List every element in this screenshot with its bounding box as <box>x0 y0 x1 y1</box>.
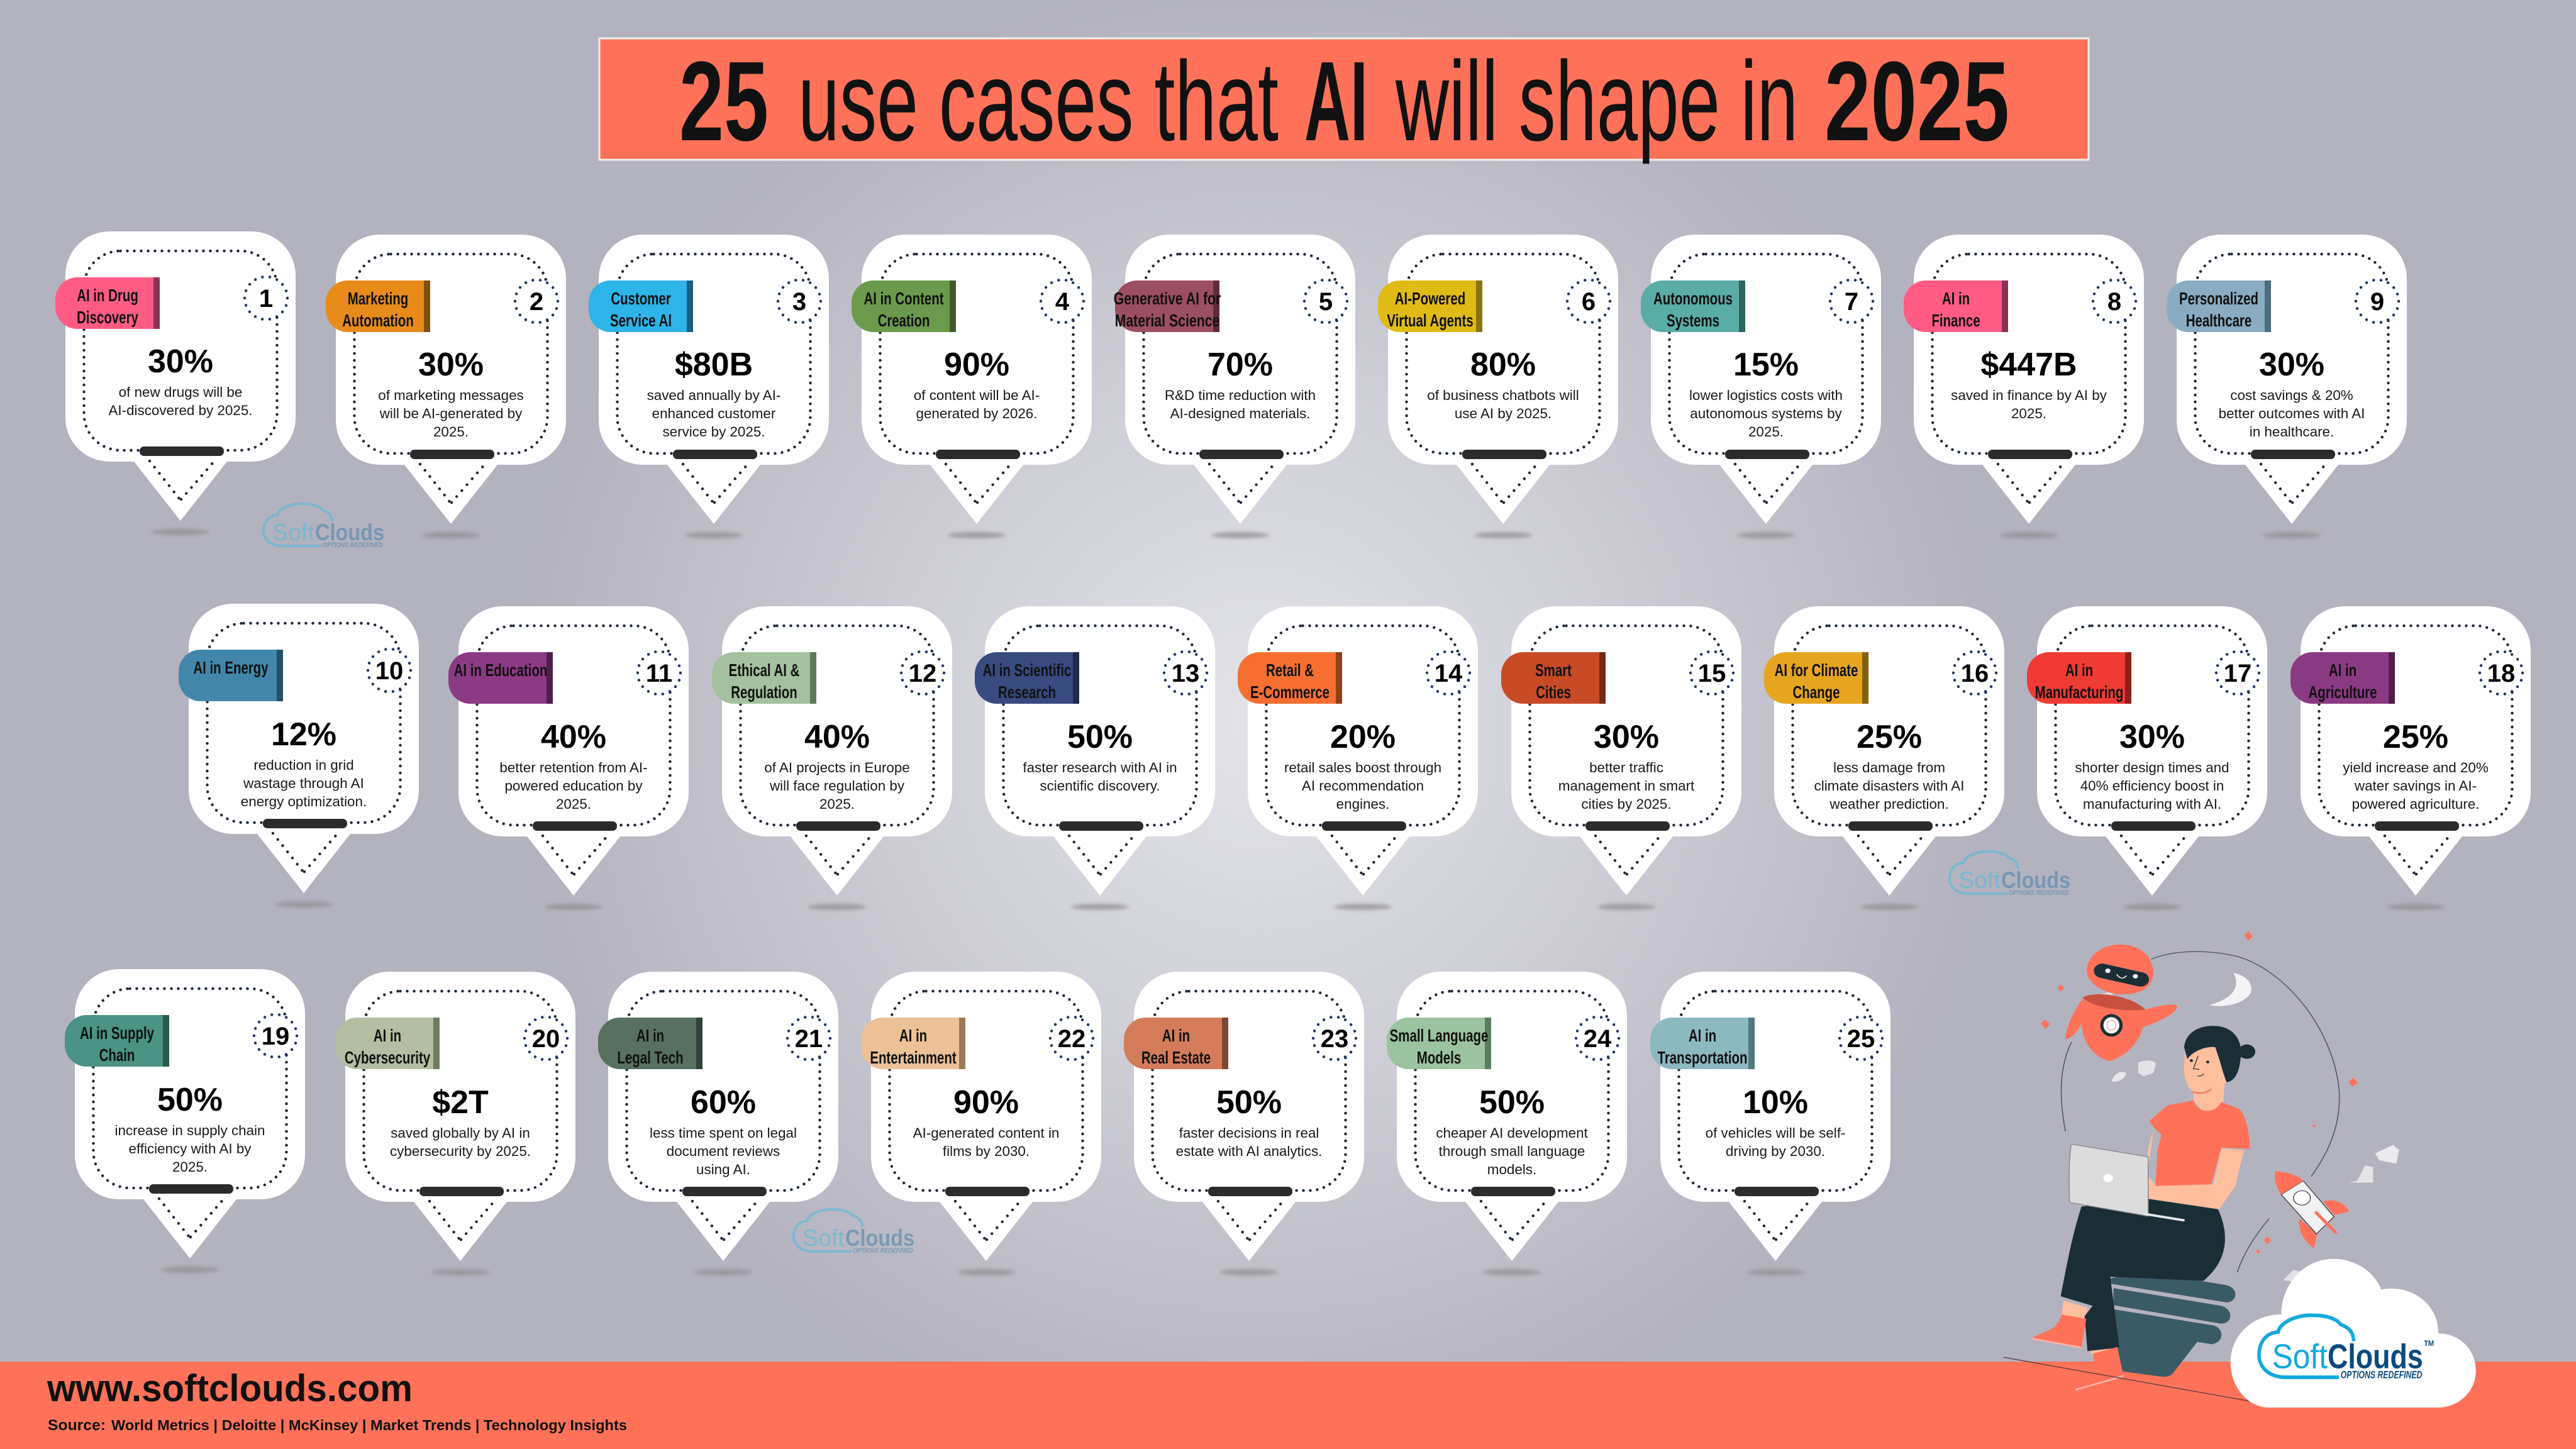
title <box>599 38 2089 165</box>
card 10: 12% <box>271 716 336 753</box>
card 15: Smart <box>1535 661 1572 680</box>
card 6: 6 <box>1582 288 1596 316</box>
card 9: Healthcare <box>2186 311 2251 331</box>
card 21: using AI. <box>696 1162 750 1177</box>
card 16: Change <box>1793 683 1840 702</box>
card 11: 11 <box>646 660 672 687</box>
card 18 <box>2290 606 2531 910</box>
card 17: 40% efficiency boost in <box>2080 778 2224 794</box>
card 18: powered agriculture. <box>2352 796 2479 812</box>
card 6: Virtual Agents <box>1387 311 1474 331</box>
sparkles <box>2041 931 2358 1253</box>
card 7: 15% <box>1733 347 1799 383</box>
card 23: 50% <box>1216 1084 1282 1121</box>
card 2: of marketing messages <box>378 387 524 403</box>
watermark logo 1: Clouds <box>315 519 384 545</box>
card 15: 15 <box>1698 660 1726 687</box>
card 13: scientific discovery. <box>1040 778 1160 794</box>
card 3: service by 2025. <box>662 424 765 440</box>
card 4: Creation <box>878 311 930 331</box>
card 17 <box>2027 606 2267 910</box>
watermark logo 2 <box>1950 852 2070 897</box>
card 25 <box>1650 972 1890 1275</box>
card 19: 2025. <box>172 1159 208 1175</box>
rocket <box>2275 1171 2349 1248</box>
card 5: Generative AI for <box>1114 289 1221 309</box>
card 7: Systems <box>1667 311 1719 331</box>
card 14: AI recommendation <box>1302 778 1424 794</box>
card 19: 19 <box>262 1023 289 1050</box>
card 4: 4 <box>1055 288 1070 316</box>
robot <box>2065 945 2177 1061</box>
watermark logo 3 <box>794 1209 914 1255</box>
card 7: 2025. <box>1748 424 1784 440</box>
card 12: 40% <box>804 719 870 755</box>
card 13: Research <box>998 683 1056 702</box>
card 20: cybersecurity by 2025. <box>390 1143 531 1159</box>
card 13: 13 <box>1172 660 1199 687</box>
card 11: 2025. <box>556 796 591 812</box>
card 11 <box>448 606 689 910</box>
card 5: Material Science <box>1115 311 1219 331</box>
card 19 <box>65 969 305 1273</box>
card 8: saved in finance by AI by <box>1951 387 2107 403</box>
card 18: AI in <box>2329 661 2357 680</box>
card 12: Ethical AI & <box>729 661 799 680</box>
card 11: 40% <box>541 719 606 755</box>
card 16: climate disasters with AI <box>1814 778 1964 794</box>
neck and arms <box>2194 1073 2225 1114</box>
card 2: Marketing <box>348 289 408 309</box>
card 2: will be AI-generated by <box>379 406 523 421</box>
shirt <box>2150 1101 2250 1186</box>
card 6: use AI by 2025. <box>1455 406 1552 421</box>
card 13: faster research with AI in <box>1023 760 1177 775</box>
card 6: AI-Powered <box>1395 289 1465 309</box>
card 20: AI in <box>374 1026 401 1046</box>
card 16: AI for Climate <box>1775 661 1858 680</box>
card 14: E-Commerce <box>1250 683 1330 702</box>
card 2: 2025. <box>433 424 469 440</box>
card 12: of AI projects in Europe <box>764 760 910 775</box>
card 16: weather prediction. <box>1829 796 1949 812</box>
footer band: www.softclouds.com <box>47 1367 413 1409</box>
card 11: AI in Education <box>454 661 547 680</box>
card 23 <box>1124 972 1364 1275</box>
card 16: 16 <box>1961 660 1989 687</box>
card 12: Regulation <box>731 683 797 702</box>
card 22: AI in <box>899 1026 927 1046</box>
card 1 <box>55 231 296 535</box>
watermark logo 3: OPTIONS REDEFINED <box>853 1247 913 1255</box>
card 10: 10 <box>375 657 403 685</box>
card 5 <box>1114 235 1355 538</box>
card 1: 1 <box>259 285 273 313</box>
card 23: faster decisions in real <box>1179 1125 1319 1141</box>
card 16: 25% <box>1857 719 1922 755</box>
card 5: AI-designed materials. <box>1170 406 1310 421</box>
card 11: better retention from AI- <box>499 760 648 775</box>
card 20 <box>335 972 575 1275</box>
card 1: AI-discovered by 2025. <box>108 402 253 418</box>
hair <box>2184 1026 2241 1082</box>
orbit arcs <box>2061 952 2340 1272</box>
title: 25 <box>679 38 769 165</box>
card 24 <box>1387 972 1627 1275</box>
card 18: yield increase and 20% <box>2343 760 2489 775</box>
card 17: 30% <box>2119 719 2185 755</box>
card 14: 20% <box>1330 719 1396 755</box>
card 20: saved globally by AI in <box>391 1125 530 1141</box>
card 15: 30% <box>1594 719 1659 755</box>
shoes <box>2031 1314 2086 1348</box>
card 1: AI in Drug <box>77 286 138 306</box>
card 7: Autonomous <box>1653 289 1733 309</box>
card 4: AI in Content <box>863 289 944 309</box>
card 24: Small Language <box>1390 1026 1488 1046</box>
card 6: 80% <box>1470 347 1536 383</box>
card 17: shorter design times and <box>2075 760 2229 775</box>
card 7 <box>1641 235 1881 538</box>
card 5: 70% <box>1208 347 1273 383</box>
card 21: document reviews <box>667 1143 780 1159</box>
card 5: R&D time reduction with <box>1165 387 1316 403</box>
card 6: of business chatbots will <box>1427 387 1579 403</box>
card 23: 23 <box>1321 1025 1348 1053</box>
card 12: will face regulation by <box>769 778 905 794</box>
main SoftClouds logo: OPTIONS REDEFINED <box>2341 1370 2422 1381</box>
card 10: AI in Energy <box>193 658 269 678</box>
card 19: increase in supply chain <box>115 1123 265 1138</box>
card 7: 7 <box>1845 288 1858 316</box>
card 24: Models <box>1417 1048 1461 1068</box>
card 24: 50% <box>1479 1084 1545 1121</box>
card 22 <box>861 972 1101 1275</box>
watermark logo 3: Clouds <box>845 1225 914 1251</box>
card 13: 50% <box>1067 719 1133 755</box>
card 10: energy optimization. <box>241 794 367 809</box>
face <box>2184 1033 2231 1094</box>
card 5: 5 <box>1319 288 1333 316</box>
woman <box>2031 1026 2255 1390</box>
card 17: AI in <box>2065 661 2093 680</box>
watermark logo 2: Clouds <box>2001 867 2070 893</box>
card 24: models. <box>1487 1162 1536 1177</box>
watermark logo 2: Soft <box>1958 867 2001 893</box>
title: use cases that <box>798 38 1279 165</box>
card 15: Cities <box>1536 683 1571 702</box>
card 16: less damage from <box>1833 760 1945 775</box>
card 3: 3 <box>792 288 806 316</box>
main SoftClouds logo: Clouds <box>2328 1338 2423 1376</box>
card 22: 22 <box>1058 1025 1085 1053</box>
card 14: engines. <box>1336 796 1389 812</box>
card 3: $80B <box>675 347 753 383</box>
title: 2025 <box>1824 38 2009 165</box>
card 9: in healthcare. <box>2250 424 2334 440</box>
card 9: cost savings & 20% <box>2230 387 2353 403</box>
card 23: Real Estate <box>1141 1048 1211 1068</box>
card 15: cities by 2025. <box>1581 796 1672 812</box>
card 20: $2T <box>432 1084 489 1121</box>
card 24: 24 <box>1584 1025 1612 1053</box>
card 14: Retail & <box>1266 661 1314 680</box>
card 21 <box>598 972 838 1275</box>
card 9 <box>2167 235 2407 538</box>
card 13 <box>975 606 1215 910</box>
card 8: $447B <box>1980 347 2077 383</box>
card 18: 18 <box>2487 660 2515 687</box>
card 22: AI-generated content in <box>913 1125 1059 1141</box>
card 25: AI in <box>1689 1026 1716 1046</box>
card 4 <box>852 235 1092 538</box>
card 17: 17 <box>2224 660 2251 687</box>
card 17: Manufacturing <box>2035 683 2123 702</box>
card 18: water savings in AI- <box>2354 778 2477 794</box>
ground line <box>2004 1357 2249 1401</box>
card 8: Finance <box>1931 311 1980 331</box>
card 10: reduction in grid <box>253 757 354 773</box>
card 22: films by 2030. <box>943 1143 1030 1159</box>
card 23: estate with AI analytics. <box>1176 1143 1322 1159</box>
card 2: 2 <box>530 288 543 316</box>
card 22: 90% <box>953 1084 1019 1121</box>
card 3: saved annually by AI- <box>647 387 780 403</box>
card 25: 25 <box>1847 1025 1875 1053</box>
card 15: management in smart <box>1558 778 1695 794</box>
watermark logo 1: Soft <box>272 519 315 545</box>
card 11: powered education by <box>504 778 643 794</box>
card 19: Chain <box>99 1046 135 1065</box>
title: AI <box>1304 38 1368 165</box>
card 12 <box>712 606 952 910</box>
card 8: 2025. <box>2011 406 2046 421</box>
stool <box>2109 1272 2235 1377</box>
card 21: Legal Tech <box>617 1048 684 1068</box>
moon and smoke <box>2111 973 2399 1282</box>
card 10 <box>179 604 419 908</box>
illustration: woman with laptop, robot and rocket <box>2004 931 2476 1407</box>
card 7: autonomous systems by <box>1690 406 1843 421</box>
card 20: 20 <box>532 1025 560 1053</box>
card 3: Customer <box>611 289 671 309</box>
card 8: 8 <box>2107 288 2121 316</box>
card 18: 25% <box>2383 719 2448 755</box>
main SoftClouds logo: TM <box>2424 1340 2434 1348</box>
card 8: AI in <box>1942 289 1970 309</box>
title: will shape in <box>1395 38 1798 165</box>
laptop <box>2069 1144 2148 1216</box>
card 2: 30% <box>418 347 484 383</box>
card 25: Transportation <box>1657 1048 1748 1068</box>
card 9: 9 <box>2370 288 2384 316</box>
card 25: of vehicles will be self- <box>1706 1125 1845 1141</box>
card 21: AI in <box>636 1026 664 1046</box>
footer band: World Metrics | Deloitte | McKinsey | Market Trends | Technology Insights <box>111 1417 627 1433</box>
card 25: 10% <box>1743 1084 1808 1121</box>
card 10: wastage through AI <box>243 775 364 791</box>
card 24: through small language <box>1439 1143 1585 1159</box>
card 23: AI in <box>1162 1026 1190 1046</box>
watermark logo 1: OPTIONS REDEFINED <box>323 541 383 549</box>
card 19: AI in Supply <box>80 1024 154 1043</box>
card 2 <box>326 235 566 538</box>
card 3: enhanced customer <box>652 406 776 421</box>
card 3: Service AI <box>610 311 672 331</box>
card 12: 2025. <box>819 796 855 812</box>
card 14: retail sales boost through <box>1284 760 1441 775</box>
card 1: of new drugs will be <box>119 384 242 400</box>
card 20: Cybersecurity <box>345 1048 430 1068</box>
card 1: 30% <box>148 343 213 380</box>
card 1: Discovery <box>77 308 138 328</box>
main SoftClouds logo: Soft <box>2272 1338 2328 1376</box>
card 9: Personalized <box>2179 289 2258 309</box>
card 9: 30% <box>2259 347 2324 383</box>
card 21: 60% <box>691 1084 756 1121</box>
card 14 <box>1238 606 1478 910</box>
card 4: of content will be AI- <box>914 387 1040 403</box>
card 19: efficiency with AI by <box>129 1141 252 1157</box>
card 2: Automation <box>342 311 414 331</box>
card 21: 21 <box>795 1025 823 1053</box>
card 3 <box>589 235 829 538</box>
watermark logo 2: OPTIONS REDEFINED <box>2009 889 2069 897</box>
card 9: better outcomes with AI <box>2219 406 2365 421</box>
card 16 <box>1764 606 2004 910</box>
card 22: Entertainment <box>870 1048 957 1068</box>
card 17: manufacturing with AI. <box>2083 796 2221 812</box>
card 13: AI in Scientific <box>983 661 1071 680</box>
footer band <box>0 1362 2576 1449</box>
card 19: 50% <box>157 1082 223 1118</box>
ankles <box>2062 1301 2087 1319</box>
card 4: 90% <box>944 347 1009 383</box>
white cloud <box>2231 1259 2476 1407</box>
watermark logo 1 <box>264 504 384 549</box>
trousers <box>2061 1199 2225 1351</box>
card 15 <box>1501 606 1741 910</box>
main SoftClouds logo <box>2259 1315 2434 1381</box>
card 7: lower logistics costs with <box>1689 387 1843 403</box>
card 21: less time spent on legal <box>650 1125 797 1141</box>
card 14: 14 <box>1435 660 1463 687</box>
card 15: better traffic <box>1589 760 1663 775</box>
card 18: Agriculture <box>2309 683 2377 702</box>
card 24: cheaper AI development <box>1436 1125 1589 1141</box>
card 12: 12 <box>909 660 936 687</box>
card 4: generated by 2026. <box>916 406 1037 421</box>
card 8 <box>1904 235 2144 538</box>
footer band: Source: <box>48 1417 106 1434</box>
watermark logo 3: Soft <box>802 1225 845 1251</box>
card 6 <box>1378 235 1618 538</box>
card 25: driving by 2030. <box>1726 1143 1825 1159</box>
